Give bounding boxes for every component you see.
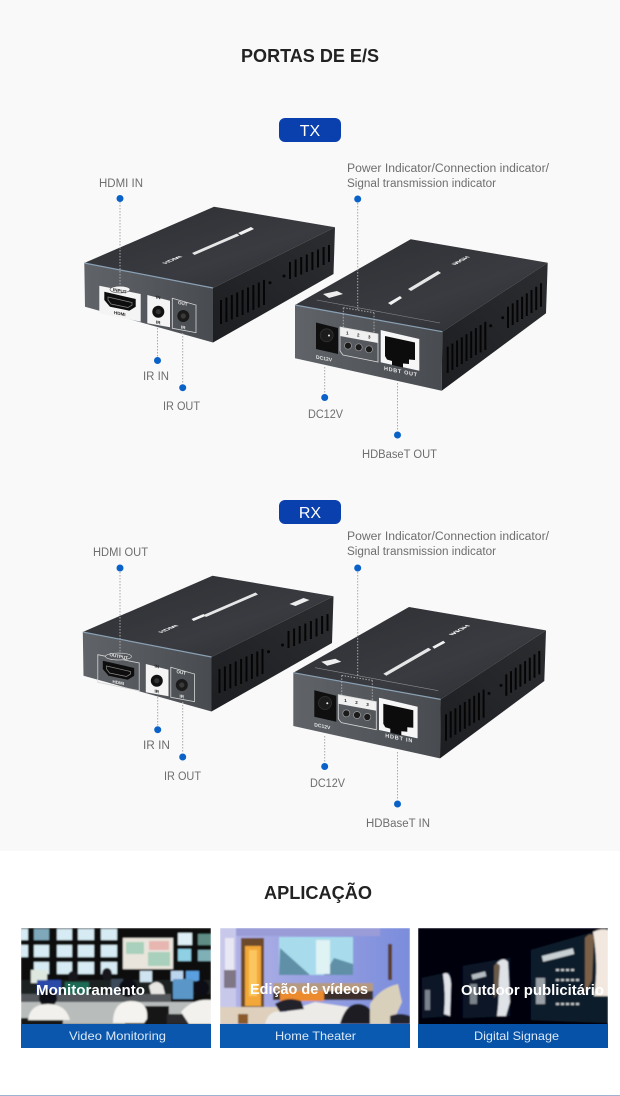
device: RX front view: HDMI [112, 679, 124, 686]
callout: TX DC12V [308, 367, 343, 421]
device: RX front view: IN [154, 664, 159, 669]
badge: RX: RX [299, 505, 321, 522]
device: RX rear view: 3 [366, 702, 369, 707]
callout: RX DC12V [310, 736, 345, 790]
device: TX front view: HDMI [162, 256, 185, 264]
device: RX front view: HDMI [158, 625, 181, 633]
bottom rule [0, 1095, 620, 1096]
callout: RX IR IN [143, 697, 170, 752]
title: ports: PORTAS DE E/S [241, 46, 379, 66]
device: RX rear view: 2 [355, 700, 358, 705]
callout: TX IR IN [143, 328, 169, 383]
card: home theater: Home Theater [275, 1029, 356, 1043]
callout: HDBaseT OUT: HDBaseT OUT [362, 449, 437, 461]
device: TX front view [84, 207, 335, 342]
badge: RX [279, 500, 341, 524]
card: digital signage: Outdoor publicitário [461, 983, 604, 999]
callout: RX indicators: Signal transmission indicator [347, 546, 496, 558]
card: home theater: Edição de vídeos [250, 982, 368, 998]
device: TX rear view: 1 [346, 330, 349, 336]
card: digital signage [418, 928, 608, 1048]
badge: TX [279, 118, 341, 142]
device: TX front view: INPUT [113, 287, 127, 295]
callout: RX DC12V: DC12V [310, 778, 345, 790]
device: TX front view: OUT [178, 300, 188, 307]
callout: HDBaseT IN [366, 752, 430, 830]
card: home theater [220, 928, 410, 1048]
callout: TX indicators [343, 163, 550, 333]
callout: TX indicators: Power Indicator/Connection indicator/ [347, 163, 550, 175]
callout: TX indicators: Signal transmission indicator [347, 178, 496, 190]
callout: HDMI IN: HDMI IN [99, 178, 143, 190]
device: TX rear view: 2 [357, 332, 360, 338]
card: video monitoring: Video Monitoring [69, 1029, 166, 1043]
device: TX rear view [295, 239, 548, 391]
callout: TX IR OUT [163, 333, 200, 413]
card: digital signage: Digital Signage [474, 1029, 559, 1043]
callout: RX IR OUT: IR OUT [164, 771, 201, 783]
device: TX rear view: 3 [368, 334, 371, 340]
callout: RX IR IN: IR IN [143, 740, 170, 752]
device: RX front view: IR [154, 689, 160, 695]
device: RX front view: OUT [176, 669, 186, 676]
device: RX front view: IR [180, 694, 185, 700]
callout: TX DC12V: DC12V [308, 409, 343, 421]
callout: HDMI IN [99, 178, 143, 286]
panel: ports background [0, 0, 620, 851]
callout: HDBaseT OUT [362, 383, 437, 461]
device: RX rear view: DC12V [314, 722, 331, 732]
device: TX front view: IN [156, 295, 160, 300]
callout: HDMI OUT: HDMI OUT [93, 547, 148, 559]
device: TX front view: HDMI [114, 310, 125, 317]
card: video monitoring: Monitoramento [36, 983, 145, 999]
device: RX rear view: HDMI [447, 624, 472, 636]
device: TX front view: IR [156, 320, 161, 326]
callout: TX IR IN: IR IN [143, 371, 169, 383]
device: RX front view: OUTPUT [110, 652, 128, 661]
callout: HDMI OUT [93, 547, 148, 655]
card: video monitoring [19, 928, 211, 1048]
title: application: APLICAÇÃO [264, 882, 372, 903]
device: RX front view [83, 576, 334, 712]
device: TX front view: IR [181, 325, 186, 331]
callout: RX IR OUT [164, 702, 201, 783]
device: RX rear view: 1 [344, 698, 347, 703]
callout: RX indicators [342, 531, 550, 700]
badge: TX: TX [300, 123, 321, 140]
callout: HDBaseT IN: HDBaseT IN [366, 818, 430, 830]
device: RX rear view [293, 607, 546, 758]
device: TX rear view: HDMI [449, 256, 472, 265]
callout: RX indicators: Power Indicator/Connection indicator/ [347, 531, 550, 543]
device: TX rear view: HDBT OUT [384, 366, 418, 379]
callout: TX IR OUT: IR OUT [163, 401, 200, 413]
device: RX rear view: HDBT IN [385, 733, 412, 745]
device: TX rear view: DC12V [316, 355, 333, 364]
